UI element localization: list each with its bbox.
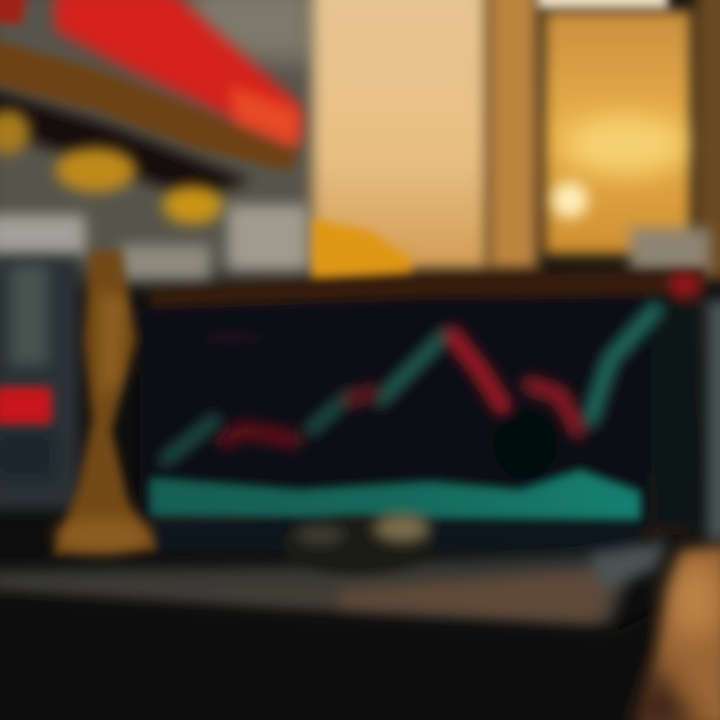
right pale box <box>630 228 710 273</box>
background: right wall and window <box>488 0 720 280</box>
pale boxes mid left <box>0 205 308 280</box>
yellow hanging lights <box>0 110 223 224</box>
laptop hinge <box>590 540 668 590</box>
screen surface <box>140 296 672 530</box>
background: upper left grey wall <box>0 0 325 280</box>
faint red marks <box>215 335 250 340</box>
orange object behind laptop <box>312 218 412 280</box>
figurine body <box>52 250 158 555</box>
window glow <box>563 115 687 175</box>
figurine base <box>55 517 151 553</box>
glowing window <box>544 10 692 255</box>
chart: dark lower edge <box>150 522 640 552</box>
keyboard deck <box>0 552 640 625</box>
chart: teal area band <box>150 470 640 520</box>
tan pillar <box>488 0 538 270</box>
dark foreground <box>0 595 660 720</box>
chart: dark candle cluster <box>493 410 557 480</box>
lower left dark <box>0 430 55 480</box>
top right red tick <box>669 272 701 298</box>
figurine highlight <box>100 290 125 400</box>
dark right edge <box>695 0 720 280</box>
right edge glare <box>705 300 720 540</box>
wooden figurine <box>52 250 158 555</box>
mouse highlight <box>374 514 430 542</box>
desk surface <box>0 540 720 720</box>
green segments <box>165 310 655 460</box>
brown band <box>0 35 300 172</box>
chart: line series <box>165 310 655 460</box>
computer mouse <box>283 514 433 575</box>
dark underside <box>0 85 250 200</box>
wooden table right <box>640 545 720 720</box>
red canopy <box>55 0 300 145</box>
red indicator <box>0 388 51 424</box>
warm deck tone <box>340 568 620 622</box>
background: cream column <box>312 0 488 270</box>
left monitor <box>0 255 80 510</box>
red segments <box>225 335 578 440</box>
window top light <box>538 0 668 8</box>
bright lamp <box>552 182 588 218</box>
monitor stripes <box>10 265 48 365</box>
laptop screen <box>140 268 720 552</box>
screen bezel <box>150 268 705 535</box>
mouse body <box>283 515 433 575</box>
awning: red and brown ledge <box>0 0 300 200</box>
